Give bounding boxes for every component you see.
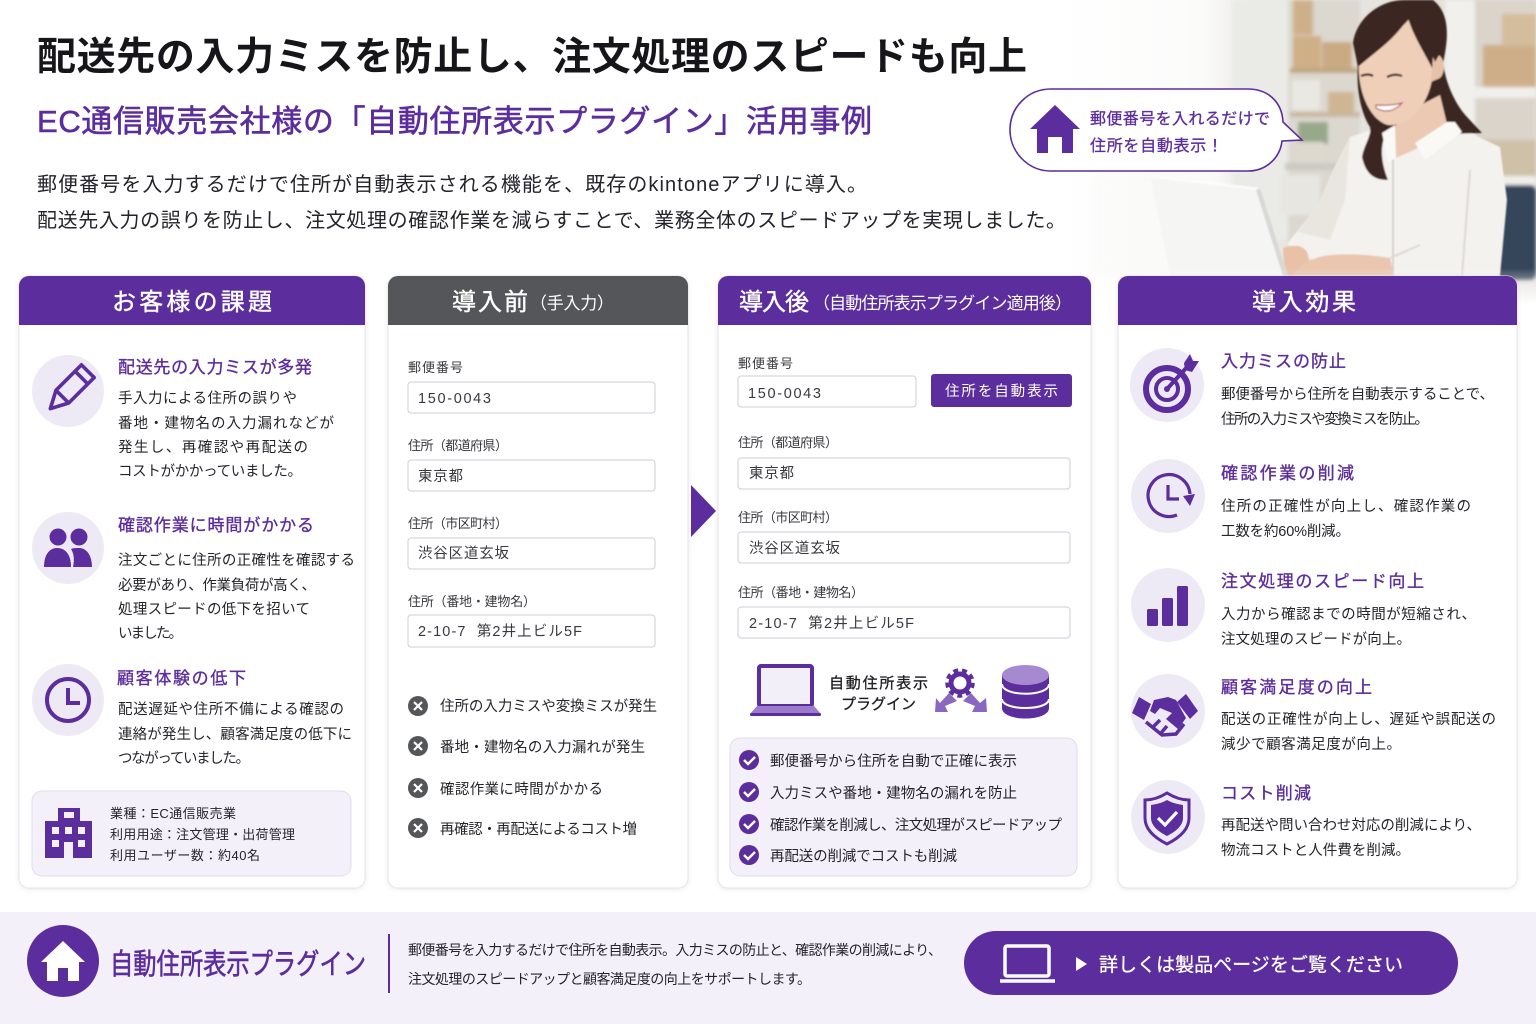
company info box (32, 791, 351, 876)
problem list (408, 696, 657, 838)
benefits checklist: 郵便番号から住所を自動で正確に表示 (770, 753, 1017, 770)
plugin label: プラグイン (841, 696, 916, 713)
speech bubble callout: 住所を自動表示！ (1090, 137, 1223, 155)
product description: 郵便番号を入力するだけで住所を自動表示。入力ミスの防止と、確認作業の削減により、 (408, 942, 942, 958)
result 4 text: 配送の正確性が向上し、遅延や誤配送の (1221, 711, 1496, 728)
result 5 text: 再配送や問い合わせ対応の削減により、 (1221, 817, 1481, 834)
benefits checklist (730, 738, 1077, 876)
icon: database (1002, 665, 1049, 718)
panel: before: （手入力） (530, 294, 614, 313)
result 3 text (1221, 572, 1476, 648)
icon: gear with arrows (935, 670, 987, 712)
form: before: 渋谷区道玄坂 (418, 545, 510, 562)
icon: clock (32, 664, 104, 736)
icon: handshake (1131, 674, 1205, 748)
issue 3 text: 顧客体験の低下 (117, 669, 246, 688)
issue 1 text: 発生し、再確認や再配送の (118, 439, 308, 456)
product description: 注文処理のスピードアップと顧客満足度の向上をサポートします。 (408, 971, 811, 987)
panel: after (718, 276, 1091, 888)
form: after: 住所（市区町村） (738, 510, 838, 525)
panel: customer issues (19, 276, 365, 888)
panel: before: 導入前 (452, 289, 528, 316)
form: after: 住所を自動表示 (945, 383, 1058, 400)
form: after: 150-0043 (748, 386, 821, 402)
issue 1 text: 配送先の入力ミスが多発 (118, 358, 312, 377)
form: after (738, 356, 1072, 638)
result 2 text: 確認作業の削減 (1221, 464, 1354, 483)
issue 2 text: 処理スピードの低下を招いて (118, 601, 310, 618)
result 3 text: 入力から確認までの時間が短縮され、 (1221, 606, 1476, 623)
title: 配送先の入力ミスを防止し、注文処理のスピードも向上 (37, 36, 1027, 79)
issue 3 text: 配送遅延や住所不備による確認の (118, 701, 344, 718)
result 1 text: 入力ミスの防止 (1221, 352, 1346, 371)
panel: after: （自動住所表示プラグイン適用後） (813, 294, 1072, 313)
plugin label: 自動住所表示 (829, 675, 928, 692)
issue 3 text: 連絡が発生し、顧客満足度の低下に (118, 726, 352, 743)
panel: customer issues: お客様の課題 (112, 289, 272, 316)
intro text: 郵便番号を入力するだけで住所が自動表示される機能を、既存のkintoneアプリに導入。 (37, 173, 867, 196)
form: before: 2-10-7 第2井上ビル5F (418, 623, 582, 640)
panel: results (1118, 276, 1517, 888)
issue 2 text: 確認作業に時間がかかる (118, 516, 314, 535)
icon: bar chart (1131, 568, 1205, 642)
issue 2 text: 必要があり、作業負荷が高く、 (118, 577, 316, 594)
icon: target (1130, 348, 1204, 422)
product name: 自動住所表示プラグイン (110, 948, 366, 981)
company info box: 利用用途：注文管理・出荷管理 (110, 827, 295, 842)
issue 3 text (117, 669, 352, 767)
form: after: 郵便番号 (738, 356, 793, 371)
plugin label (829, 675, 928, 713)
issue 3 text: つながっていました。 (118, 750, 250, 767)
issue 1 text: コストがかかっていました。 (118, 463, 302, 480)
problem list: 番地・建物名の入力漏れが発生 (440, 739, 645, 756)
result 3 text: 注文処理のスピード向上 (1221, 572, 1424, 591)
form: after: 渋谷区道玄坂 (749, 540, 840, 557)
form: after: 東京都 (749, 465, 794, 482)
icon: pencil (32, 355, 104, 427)
call-to-action button: 詳しくは製品ページをご覧ください (1099, 954, 1403, 976)
issue 1 text (118, 358, 334, 480)
issue 2 text: 注文ごとに住所の正確性を確認する (118, 552, 355, 569)
result 1 text: 郵便番号から住所を自動表示することで、 (1221, 386, 1494, 403)
panel: results: 導入効果 (1252, 289, 1356, 316)
result 1 text: 住所の入力ミスや変換ミスを防止。 (1221, 411, 1429, 428)
form: before (408, 360, 655, 647)
result 1 text (1221, 352, 1494, 428)
arrow: before to after (691, 485, 716, 537)
form: before: 郵便番号 (408, 360, 463, 375)
result 5 text: コスト削減 (1221, 784, 1311, 803)
benefits checklist: 入力ミスや番地・建物名の漏れを防止 (770, 785, 1017, 802)
form: after: 2-10-7 第2井上ビル5F (749, 615, 914, 632)
footer band (0, 912, 1536, 1024)
problem list: 住所の入力ミスや変換ミスが発生 (440, 698, 657, 715)
icon: house badge (27, 925, 99, 997)
speech bubble callout (1010, 89, 1302, 171)
form: before: 住所（都道府県） (408, 438, 508, 453)
result 2 text: 住所の正確性が向上し、確認作業の (1221, 498, 1471, 515)
result 4 text (1221, 678, 1496, 753)
form: before: 150-0043 (418, 391, 491, 407)
issue 1 text: 手入力による住所の誤りや (118, 390, 297, 407)
issue 2 text (118, 516, 355, 642)
company info box: 業種：EC通信販売業 (110, 806, 236, 821)
problem list: 再確認・再配送によるコスト増 (440, 821, 637, 838)
form: before: 住所（市区町村） (408, 516, 508, 531)
result 4 text: 顧客満足度の向上 (1221, 678, 1372, 697)
result 3 text: 注文処理のスピードが向上。 (1221, 631, 1411, 648)
benefits checklist: 再配送の削減でコストも削減 (770, 848, 958, 865)
panel: before (388, 276, 688, 888)
form: before: 住所（番地・建物名） (408, 594, 536, 609)
form: before: 東京都 (418, 468, 463, 485)
result 2 text: 工数を約60%削減。 (1221, 523, 1350, 540)
icon: laptop (1000, 946, 1055, 981)
photo: woman working at a laptop (1060, 0, 1536, 305)
icon: house (1030, 105, 1080, 153)
company info box: 利用ユーザー数：約40名 (110, 848, 260, 863)
intro text (37, 173, 1066, 232)
result 2 text (1221, 464, 1471, 540)
issue 2 text: いました。 (118, 625, 183, 642)
result 4 text: 減少で顧客満足度が向上。 (1221, 736, 1401, 753)
intro text: 配送先入力の誤りを防止し、注文処理の確認作業を減らすことで、業務全体のスピードアップを実現しました。 (37, 209, 1066, 232)
form: after: 住所（番地・建物名） (738, 585, 864, 600)
call-to-action button (964, 931, 1458, 995)
result 5 text (1221, 784, 1481, 859)
result 5 text: 物流コストと人件費を削減。 (1221, 842, 1410, 859)
subtitle: EC通信販売会社様の「自動住所表示プラグイン」活用事例 (37, 104, 872, 139)
icon: clock refresh (1131, 459, 1205, 533)
benefits checklist: 確認作業を削減し、注文処理がスピードアップ (770, 817, 1062, 834)
icon: shield check (1131, 780, 1205, 854)
problem list: 確認作業に時間がかかる (440, 781, 603, 798)
panel: after: 導入後 (739, 289, 809, 316)
issue 1 text: 番地・建物名の入力漏れなどが (118, 415, 334, 432)
icon: people (32, 512, 104, 584)
icon: laptop (750, 666, 821, 716)
product description (408, 942, 942, 987)
form: after: 住所（都道府県） (738, 435, 838, 450)
speech bubble callout: 郵便番号を入れるだけで (1090, 110, 1270, 128)
icon: building (45, 808, 92, 858)
